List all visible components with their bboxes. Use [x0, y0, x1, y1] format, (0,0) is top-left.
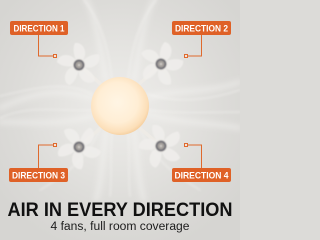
callout: direction 3 [9, 144, 68, 182]
callout: direction 4 [172, 144, 231, 182]
fan 1 [56, 43, 102, 86]
callout: direction 1: DIRECTION 1 [14, 23, 64, 34]
callout: direction 1 [10, 21, 68, 58]
fan 4 [131, 115, 192, 177]
callout: direction 2: DIRECTION 2 [175, 23, 228, 34]
airflow streaks [0, 0, 240, 200]
callout: direction 4: DIRECTION 4 [174, 170, 229, 181]
background [0, 0, 240, 240]
callout: direction 2 [172, 21, 231, 58]
infographic canvas [8, 0, 232, 233]
central light orb [91, 77, 149, 135]
subtitle: 4 fans, full room coverage [50, 221, 190, 233]
callout: direction 3: DIRECTION 3 [12, 170, 65, 181]
fan arms [79, 64, 161, 147]
fan 3 [48, 115, 111, 178]
fan 2 [132, 35, 190, 92]
